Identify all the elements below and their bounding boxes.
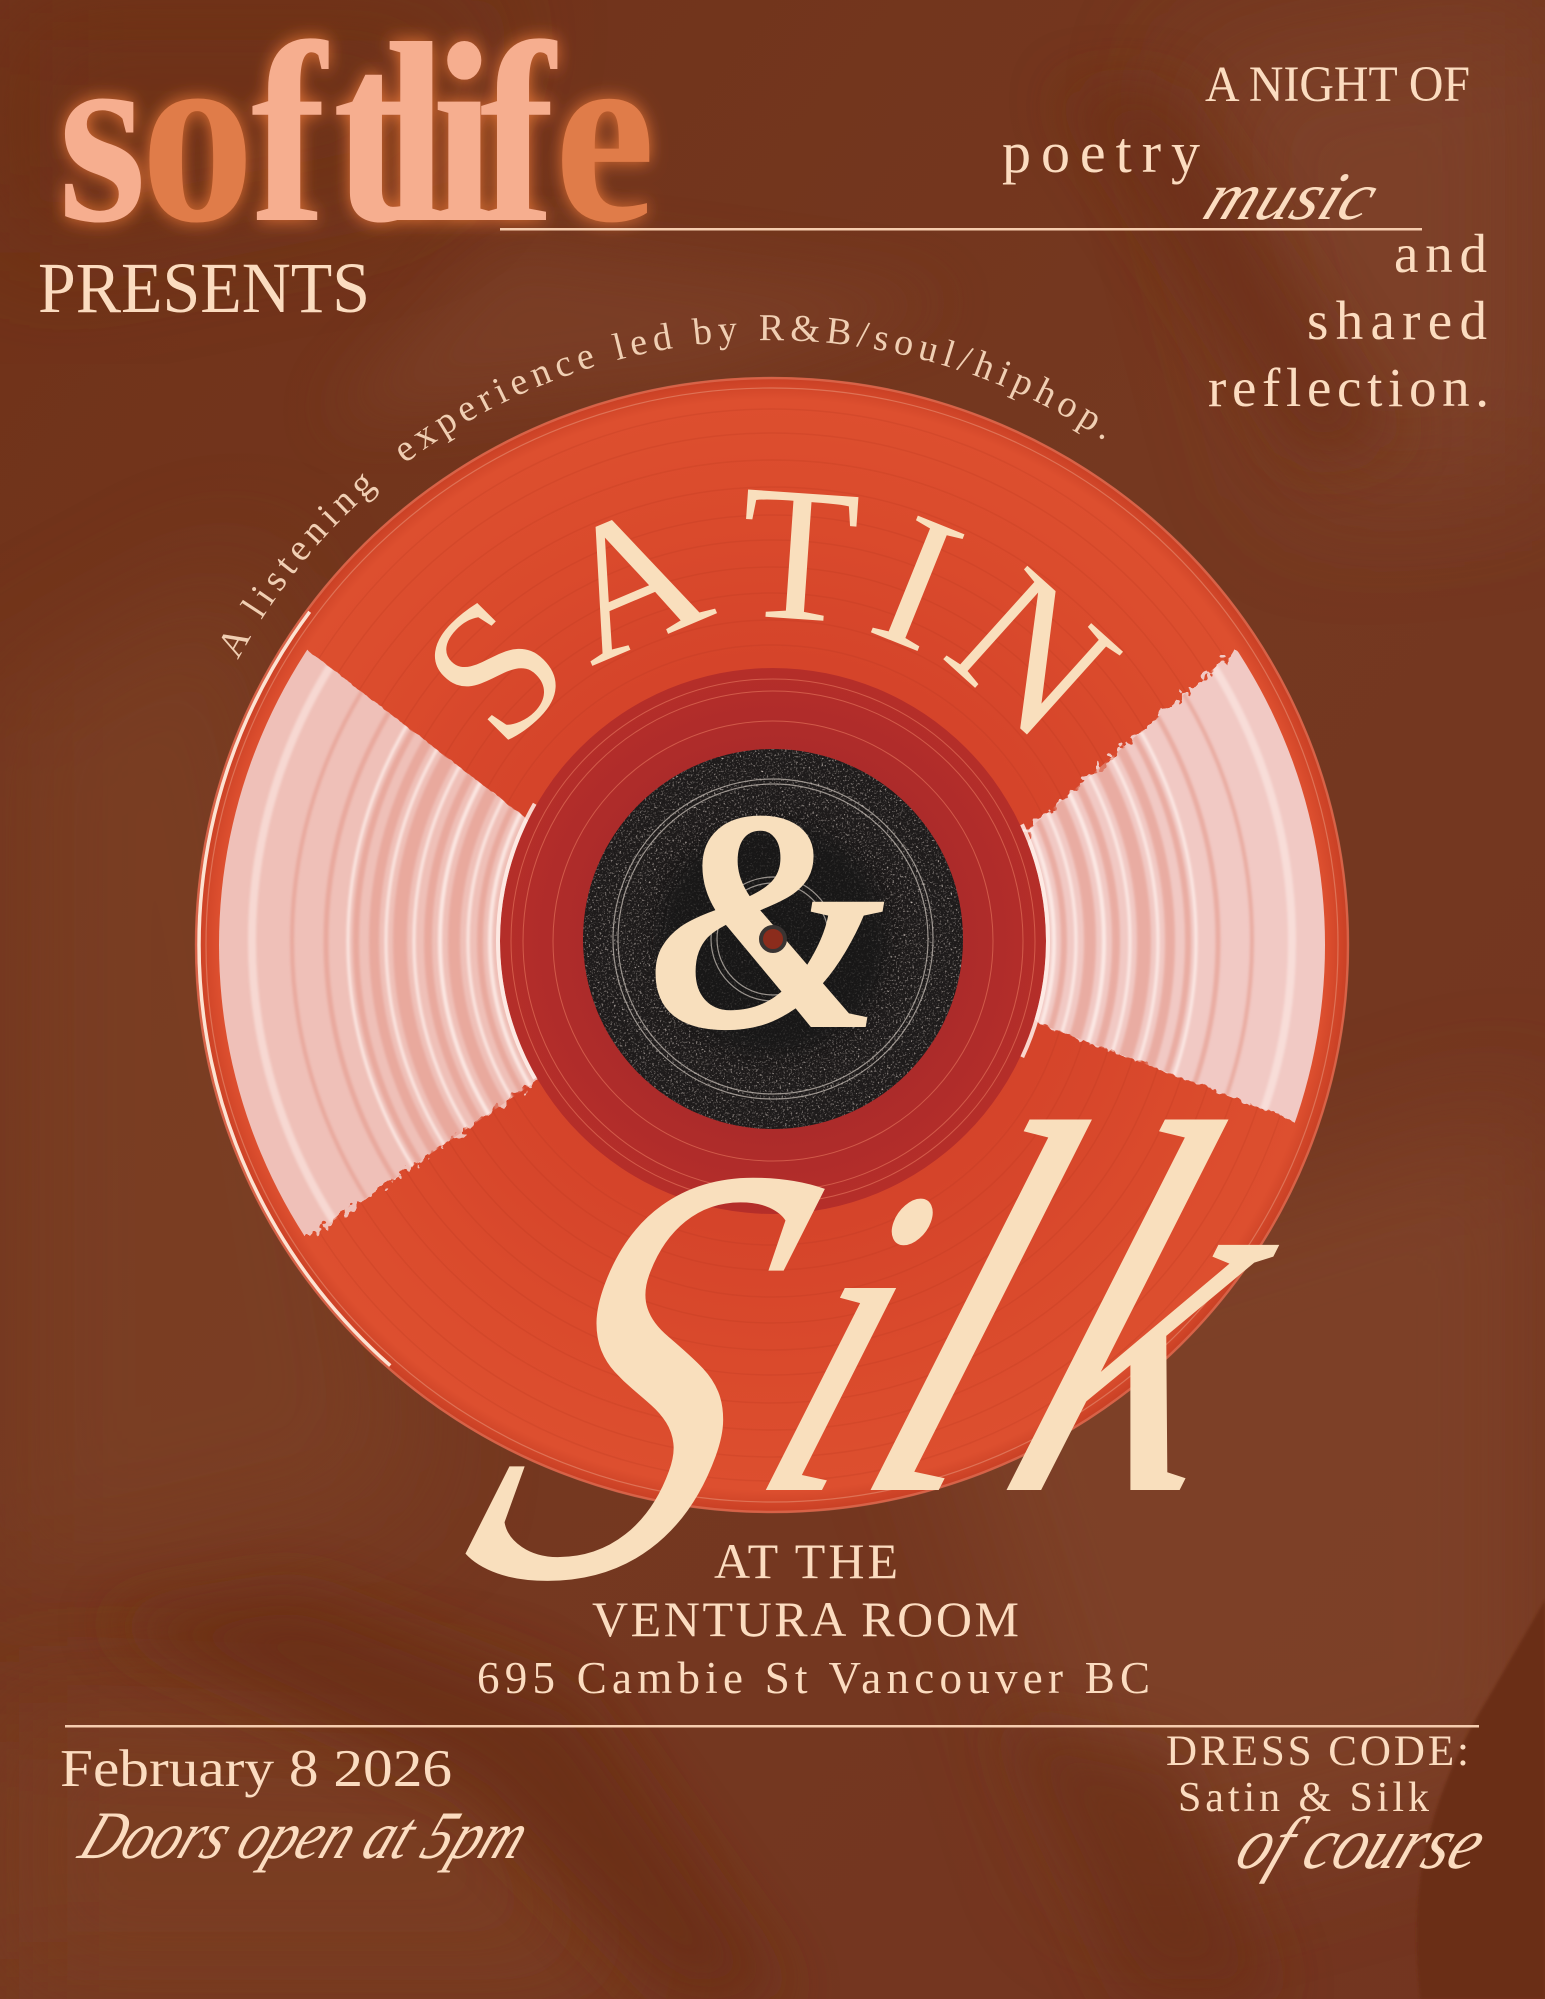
light sheen wedges <box>219 650 1325 1236</box>
venue block: AT THE <box>714 1533 898 1589</box>
presents heading: PRESENTS <box>38 248 370 328</box>
SATIN curved title: SATIN <box>434 490 1123 740</box>
dress code: DRESS CODE: <box>1166 1728 1469 1775</box>
reflection: reflection. <box>1208 357 1489 418</box>
black centre label <box>583 744 963 1129</box>
ampersand: & <box>648 744 888 1096</box>
doors time: Doors open at 5pm <box>69 1798 540 1873</box>
date: February 8 2026 <box>60 1740 452 1798</box>
dress code <box>1166 1728 1499 1884</box>
poetry: poetry <box>1002 120 1200 185</box>
and: and <box>1394 223 1487 284</box>
of course: of course <box>1225 1802 1499 1884</box>
disc body <box>195 377 1349 1513</box>
vinyl record <box>170 377 1400 1513</box>
centre hole <box>761 927 785 951</box>
inner red ring <box>500 668 1046 1214</box>
satin and silk: Satin & Silk <box>1178 1775 1429 1821</box>
venue block <box>477 1533 1150 1703</box>
venue name: VENTURA ROOM <box>592 1591 1019 1647</box>
a night of <box>1002 57 1489 418</box>
curved tagline: A listening experience led by R&B/soul/hiphop. <box>222 315 1104 660</box>
a night of: A NIGHT OF <box>1205 57 1470 113</box>
bottom divider <box>65 1725 1479 1728</box>
music: music <box>1194 159 1389 234</box>
Silk script title: i <box>711 1098 987 1586</box>
Silk script title: S <box>405 1042 886 1706</box>
shared: shared <box>1307 290 1487 351</box>
left and right sheen <box>219 650 1325 1236</box>
top divider <box>500 228 1422 230</box>
Silk script title: lk <box>806 1014 1368 1606</box>
address: 695 Cambie St Vancouver BC <box>477 1653 1150 1703</box>
